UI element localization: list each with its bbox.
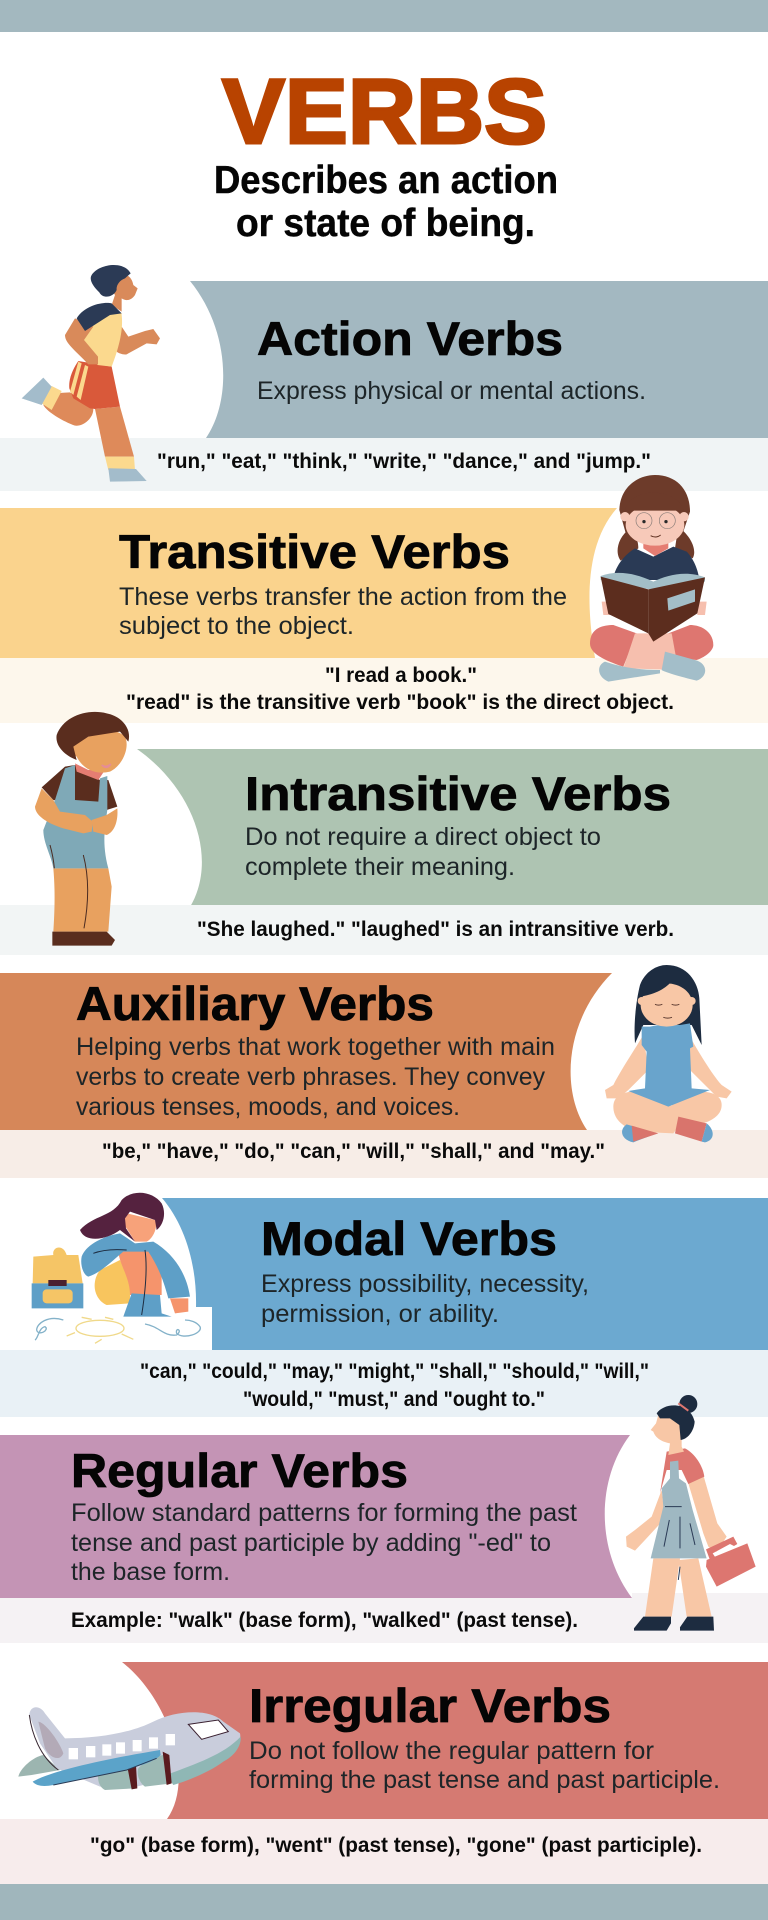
panel: transitive verbs — [0, 475, 768, 723]
example strip — [0, 1130, 768, 1178]
description: Helping verbs that work together with main — [76, 1033, 555, 1061]
icon: girl drawing with backpack — [32, 1193, 200, 1343]
example strip — [0, 1593, 768, 1643]
bottom bar — [0, 1884, 768, 1920]
examples: "be," "have," "do," "can," "will," "shall," and "may." — [102, 1140, 605, 1163]
example strip — [0, 1350, 768, 1417]
examples: "I read a book." — [325, 664, 477, 687]
examples: "can," "could," "may," "might," "shall," "should," "will," — [140, 1360, 649, 1383]
description: permission, or ability. — [261, 1300, 499, 1328]
description — [249, 1737, 720, 1794]
description — [261, 1270, 589, 1328]
examples — [126, 664, 674, 714]
examples — [140, 1360, 649, 1411]
band — [0, 973, 612, 1130]
panel: irregular verbs — [0, 1662, 768, 1884]
description: complete their meaning. — [245, 853, 515, 881]
icon: running person — [22, 265, 160, 482]
description: Express possibility, necessity, — [261, 1270, 589, 1298]
icon: meditating girl — [605, 965, 732, 1142]
panel: auxiliary verbs — [0, 965, 768, 1178]
icon: airplane — [18, 1707, 241, 1790]
icon: boy laughing — [35, 712, 129, 946]
description: forming the past tense and past participle. — [249, 1766, 720, 1794]
heading: Auxiliary Verbs — [76, 977, 434, 1030]
example strip — [0, 658, 768, 723]
panel: regular verbs — [0, 1395, 768, 1643]
examples: "would," "must," and "ought to." — [243, 1388, 545, 1411]
subtitle — [214, 159, 558, 245]
band — [122, 1662, 768, 1819]
top bar — [0, 0, 768, 32]
heading: Action Verbs — [257, 312, 563, 365]
description — [76, 1033, 555, 1121]
band — [162, 1198, 768, 1350]
band — [0, 508, 617, 658]
band — [190, 281, 768, 438]
panel: action verbs — [0, 265, 768, 491]
heading: Regular Verbs — [71, 1444, 408, 1497]
description — [119, 583, 567, 640]
icon: walking girl with bag — [626, 1395, 756, 1631]
description: Express physical or mental actions. — [257, 377, 646, 405]
band — [137, 749, 768, 907]
icon: girl reading — [590, 475, 713, 682]
description: various tenses, moods, and voices. — [76, 1093, 460, 1121]
examples: "go" (base form), "went" (past tense), "gone" (past participle). — [90, 1834, 702, 1857]
examples: Example: "walk" (base form), "walked" (past tense). — [71, 1609, 578, 1632]
band — [0, 1435, 632, 1598]
subtitle: or state of being. — [236, 202, 535, 245]
description: These verbs transfer the action from the — [119, 583, 567, 611]
description: tense and past participle by adding "-ed" to — [71, 1529, 551, 1557]
panel: intransitive verbs — [0, 712, 768, 955]
description: Do not require a direct object to — [245, 823, 601, 851]
heading: Transitive Verbs — [119, 525, 510, 578]
example strip — [0, 1819, 768, 1884]
description: Follow standard patterns for forming the past — [71, 1499, 577, 1527]
heading: Modal Verbs — [261, 1212, 557, 1265]
example strip — [0, 905, 768, 955]
example strip — [0, 438, 768, 491]
description: verbs to create verb phrases. They convey — [76, 1063, 545, 1091]
examples: "run," "eat," "think," "write," "dance," and "jump." — [157, 450, 651, 473]
heading: Irregular Verbs — [249, 1679, 611, 1732]
examples: "read" is the transitive verb "book" is the direct object. — [126, 691, 674, 714]
examples: "She laughed." "laughed" is an intransitive verb. — [197, 918, 674, 941]
panel: modal verbs — [0, 1193, 768, 1417]
description: subject to the object. — [119, 612, 354, 640]
description: Do not follow the regular pattern for — [249, 1737, 654, 1765]
heading: Intransitive Verbs — [245, 767, 671, 820]
description — [245, 823, 601, 881]
title: VERBS — [222, 61, 547, 163]
description: the base form. — [71, 1558, 230, 1586]
description — [71, 1499, 577, 1586]
subtitle: Describes an action — [214, 159, 558, 202]
